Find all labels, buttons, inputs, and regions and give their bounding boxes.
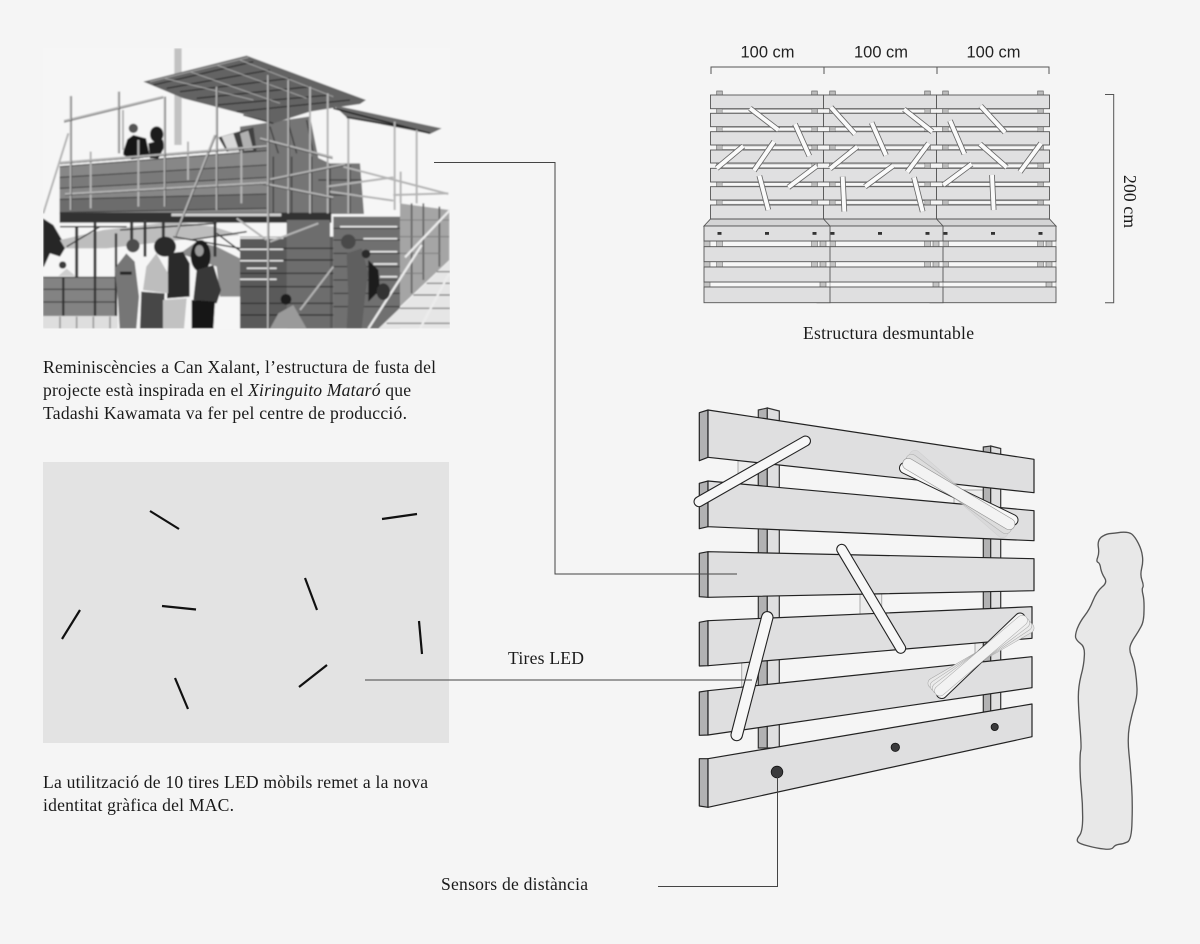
paragraph: Can Xalant reminiscences bbox=[43, 357, 436, 423]
paragraph: LED strips and MAC identity: La utilització de 10 tires LED mòbils remet a la nova bbox=[43, 772, 428, 792]
staircase rails bbox=[368, 210, 450, 329]
secondary roof bbox=[333, 105, 442, 134]
leader line: sensor label bbox=[658, 777, 778, 886]
background trees and lower sky bbox=[43, 218, 243, 297]
LED strip: moving, lower right bbox=[933, 618, 1029, 693]
upper deck occupants bbox=[123, 124, 165, 159]
lower walls bbox=[240, 237, 333, 329]
chimney bbox=[174, 48, 182, 145]
scaffolding poles bbox=[43, 75, 448, 329]
drawing: wall module perspective bbox=[699, 408, 1034, 807]
width dimension: three 100 cm modules: 100 cm bbox=[740, 42, 794, 62]
label: Tires LED: Tires LED bbox=[508, 648, 584, 668]
tower wood behind deck bbox=[240, 116, 364, 214]
panel: LED strips graphic bbox=[43, 462, 449, 743]
paragraph: Can Xalant reminiscences: projecte està inspirada en el Xiringuito Mataró que bbox=[43, 380, 411, 400]
LED strips: static bbox=[699, 441, 901, 735]
width dimension: three 100 cm modules: 100 cm bbox=[966, 42, 1020, 62]
paragraph: LED strips and MAC identity bbox=[43, 772, 428, 815]
horizontal slats bbox=[699, 410, 1034, 807]
rear vertical ghost posts bbox=[738, 455, 983, 695]
drawing: dismountable structure elevation bbox=[704, 91, 1056, 303]
paragraph: Can Xalant reminiscences: Tadashi Kawamata va fer pel centre de producció. bbox=[43, 403, 407, 423]
upper wooden wall bbox=[60, 151, 267, 214]
paragraph: Can Xalant reminiscences: Reminiscències a Can Xalant, l’estructura de fusta del bbox=[43, 357, 436, 377]
ground-floor people bbox=[58, 234, 390, 329]
label: Sensors de distància: Sensors de distància bbox=[441, 874, 588, 894]
caption: Estructura desmuntable: Estructura desmuntable bbox=[803, 323, 974, 343]
under-deck beams bbox=[60, 213, 331, 223]
paragraph: LED strips and MAC identity: identitat gràfica del MAC. bbox=[43, 795, 234, 815]
distance sensors bbox=[771, 723, 998, 778]
width dimension: three 100 cm modules: 100 cm bbox=[854, 42, 908, 62]
staircase bbox=[378, 260, 450, 329]
leader line: LED graphic to strip bbox=[365, 679, 752, 681]
LED strip: moving, upper right bbox=[905, 456, 1012, 532]
height dimension: 200 cm bbox=[1105, 94, 1140, 303]
vertical posts bbox=[758, 408, 1001, 748]
main roof bbox=[143, 56, 366, 123]
leader line: photo to slat bbox=[434, 162, 737, 574]
height dimension: 200 cm: 200 cm bbox=[1120, 175, 1140, 228]
ground-floor wall left bbox=[43, 277, 117, 317]
deck canopy underneath bbox=[60, 222, 240, 248]
LED strips on elevation bbox=[717, 106, 1041, 212]
tower window bbox=[218, 127, 257, 152]
photo: Can Xalant wooden structure bbox=[40, 43, 453, 333]
width dimension: three 100 cm modules bbox=[711, 42, 1049, 74]
human silhouette for scale bbox=[1076, 532, 1144, 849]
